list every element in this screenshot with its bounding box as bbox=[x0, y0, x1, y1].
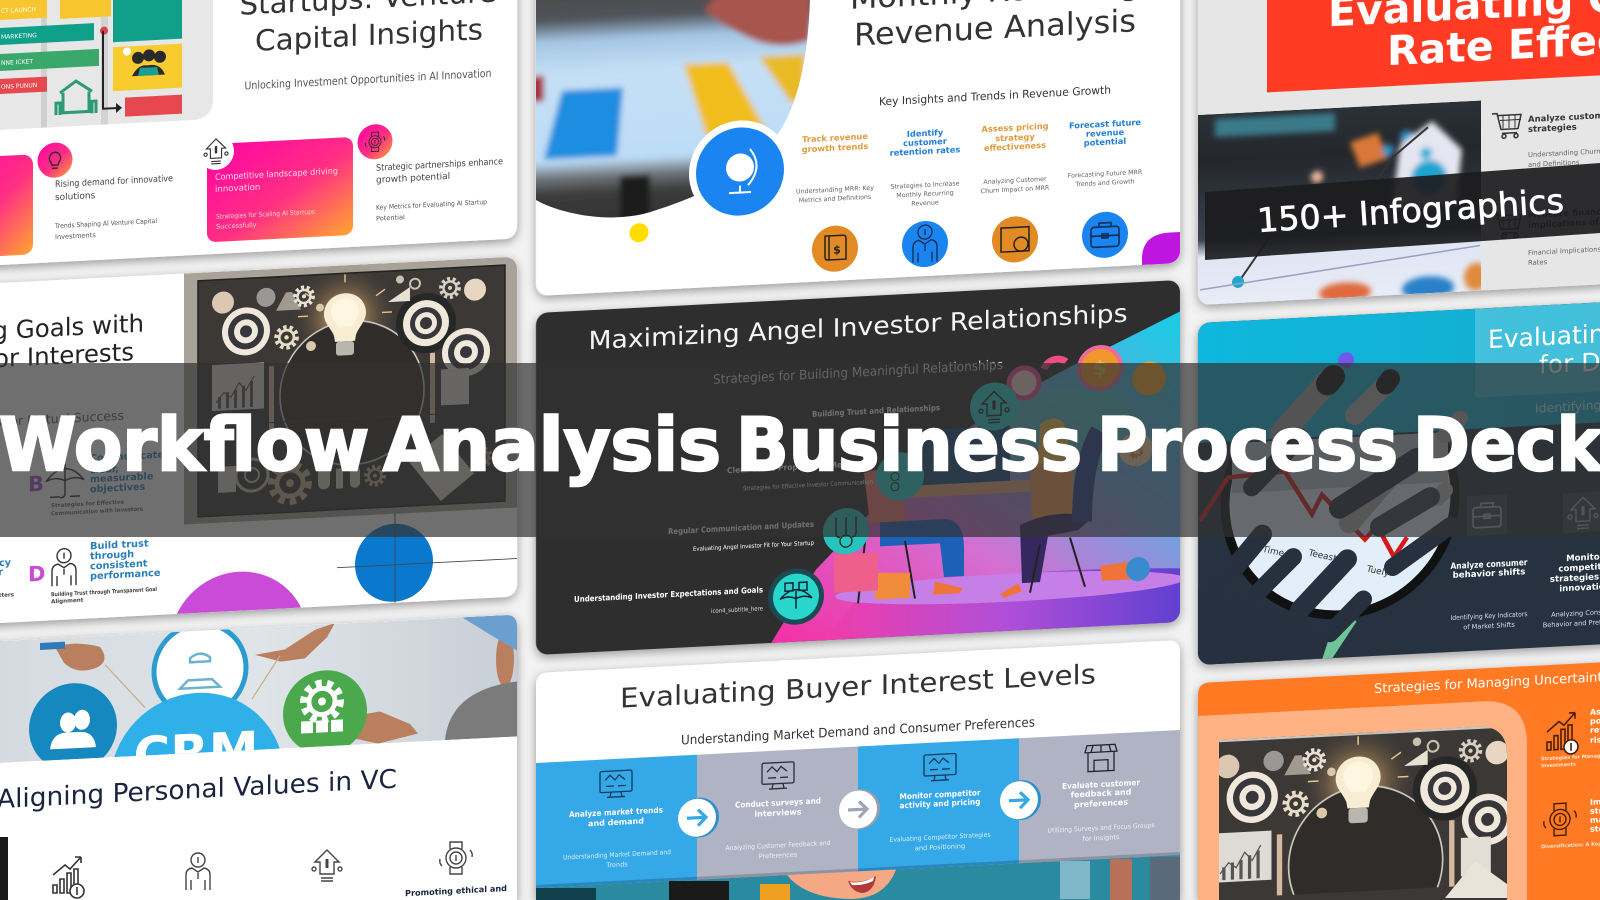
title panel bbox=[1475, 290, 1600, 419]
item D: performance bbox=[90, 568, 161, 582]
gradient card: competitive landscape bbox=[203, 137, 353, 242]
stripe: evaluate customer feedback bbox=[1019, 730, 1180, 863]
item: building trust: Building Trust and Relationships bbox=[812, 403, 940, 419]
slide card: maximizing angel investor relationships bbox=[536, 279, 1190, 660]
slide card: evaluating market shifts bbox=[1198, 290, 1600, 672]
feature: strategic partnerships: growth potential bbox=[376, 172, 450, 186]
stripe: evaluate customer feedback: for Insights bbox=[1083, 833, 1120, 843]
title band bbox=[0, 363, 1600, 537]
stripe: monitor competitor: and Positioning bbox=[915, 842, 965, 853]
item D: Build trust bbox=[90, 538, 149, 552]
title: Revenue Analysis bbox=[854, 3, 1136, 54]
column: forecast future revenue: revenue bbox=[1086, 127, 1124, 139]
title: Maximizing Angel Investor Relationships bbox=[589, 299, 1128, 355]
item D: D bbox=[28, 561, 45, 587]
slide card: aligning goals with investor interests bbox=[0, 254, 524, 632]
feature: strategic partnerships: Potential bbox=[376, 213, 405, 223]
stripe: conduct surveys: interviews bbox=[754, 807, 802, 819]
flowchart image: MARKETING bbox=[1, 32, 37, 41]
item: consumer behavior: Identifying Key Indicators bbox=[1450, 610, 1528, 622]
stripe: conduct surveys bbox=[697, 746, 858, 880]
column: identify customer retention: Strategies to Increase bbox=[890, 180, 960, 191]
blue globe badge bbox=[689, 120, 784, 216]
feature: rising demand: Trends Shaping AI Venture Capital bbox=[54, 217, 157, 230]
icon: investor man bbox=[186, 853, 210, 890]
flowchart image: ONS PUNUN bbox=[1, 82, 37, 91]
item: clear value bbox=[727, 460, 873, 491]
column: forecast future revenue: Forecast future bbox=[1069, 117, 1141, 131]
item B: clear, bbox=[90, 464, 119, 476]
column: assess pricing strategy: strategy bbox=[995, 131, 1035, 143]
item D: through bbox=[90, 549, 134, 562]
stripe: evaluate customer feedback: Utilizing Surveys and Focus Groups bbox=[1048, 821, 1155, 835]
feature: rising demand bbox=[38, 137, 173, 242]
main title: Business bbox=[736, 403, 1082, 488]
teal header bbox=[1198, 290, 1600, 443]
slide card: evaluating churn rate effects bbox=[1198, 0, 1600, 312]
diagonal stripes bbox=[1198, 347, 1460, 672]
stripe: evaluate customer feedback: feedback and bbox=[1071, 787, 1132, 800]
item B: measurable bbox=[90, 471, 154, 485]
flowchart image: NNE ICKET bbox=[1, 58, 33, 67]
churn item 2: Rates bbox=[1528, 258, 1548, 267]
column: identify customer retention: retention rates bbox=[890, 144, 960, 158]
column: identify customer retention: customer bbox=[903, 136, 948, 148]
stripe: conduct surveys: Analyzing Customer Feedback and bbox=[726, 839, 830, 852]
column: identify customer retention: Monthly Recurring bbox=[896, 190, 954, 200]
main title: Process bbox=[1097, 403, 1398, 488]
stripe: analyze market trends: Understanding Market Demand and bbox=[563, 848, 671, 862]
churn item 1: strategies bbox=[1528, 123, 1577, 135]
column: identify customer retention: Identify bbox=[907, 127, 944, 139]
flowchart image bbox=[0, 0, 213, 131]
ribbon: 150+ infographics: 150+ Infographics bbox=[1256, 181, 1565, 240]
arrow badge 1 bbox=[678, 797, 719, 839]
subtitle: Key Insights and Trends in Revenue Growth bbox=[879, 84, 1111, 108]
magnifying glass chart bbox=[1200, 379, 1455, 672]
column: assess pricing strategy: Churn Impact on MRR bbox=[981, 185, 1050, 195]
risk item 2 bbox=[1541, 795, 1600, 850]
CRM photo bbox=[0, 615, 517, 763]
column: forecast future revenue: potential bbox=[1084, 136, 1126, 148]
subtitle: Unlocking Investment Opportunities in AI Innovation bbox=[245, 67, 492, 92]
title bbox=[0, 314, 142, 368]
column: track revenue bbox=[796, 131, 874, 274]
column: assess pricing strategy: Assess pricing bbox=[981, 121, 1049, 134]
icon badge 4 bbox=[768, 567, 824, 626]
item: understanding investor expectations: icon4_subtitle_here bbox=[711, 605, 763, 615]
arrow badge 3 bbox=[1000, 779, 1041, 821]
item B: Strategies for Effective bbox=[51, 500, 124, 509]
column: track revenue: growth trends bbox=[802, 141, 868, 154]
gradient card: competitive landscape: innovation bbox=[215, 183, 260, 195]
stripe: evaluate customer feedback: Evaluate customer bbox=[1062, 778, 1140, 791]
subtitle: Strategies for Building Meaningful Relationships bbox=[713, 358, 1003, 388]
item: monitor competitor bbox=[1543, 490, 1600, 629]
stripe: conduct surveys: Preferences bbox=[759, 851, 798, 861]
board image bbox=[184, 253, 517, 525]
item: consumer behavior bbox=[1450, 493, 1528, 632]
item B: B bbox=[28, 471, 44, 497]
ribbon: 150+ infographics bbox=[1205, 163, 1600, 260]
feature: strategic partnerships: Strategic partnerships enhance bbox=[376, 157, 503, 174]
item B: Communication with Investors bbox=[51, 507, 144, 517]
stripe: monitor competitor: activity and pricing bbox=[899, 797, 981, 810]
icon: dollar house bbox=[312, 850, 342, 881]
arrow badge 2 bbox=[839, 788, 880, 830]
icon: growth chart bbox=[53, 857, 84, 898]
colourful illustration bbox=[768, 306, 1190, 648]
item: consumer behavior: of Market Shifts bbox=[1463, 621, 1515, 631]
column: identify customer retention bbox=[890, 126, 960, 269]
yellow dot bbox=[630, 223, 648, 243]
icon: dollar watch bbox=[440, 842, 472, 874]
item: clear value: Strategies for Effective Investor Communication bbox=[743, 479, 873, 492]
item: consumer behavior: behavior shifts bbox=[1453, 567, 1525, 581]
item D: consistent bbox=[90, 558, 148, 572]
board image bbox=[1201, 715, 1529, 900]
icon badge 1 bbox=[970, 381, 1018, 432]
slide card: evaluating buyer interest levels bbox=[536, 641, 1180, 900]
churn item 2 bbox=[1492, 206, 1600, 269]
column: assess pricing strategy: effectiveness bbox=[984, 140, 1046, 153]
column: assess pricing strategy: Analyzing Customer bbox=[983, 176, 1047, 186]
gradient card: competitive landscape: Successfully bbox=[216, 221, 257, 231]
stripe: monitor competitor bbox=[858, 738, 1019, 871]
column: assess pricing strategy bbox=[981, 121, 1050, 264]
colourful illustration: ₿ bbox=[1128, 439, 1144, 462]
black side bar bbox=[0, 837, 8, 900]
purple corner blob bbox=[1142, 232, 1180, 265]
blurred photo blob bbox=[536, 0, 810, 218]
feature: strategic partnerships: Key Metrics for Evaluating AI Startup bbox=[376, 198, 487, 212]
item: understanding investor expectations: Understanding Investor Expectations and Goals bbox=[574, 585, 763, 604]
item: consumer behavior: Analyze consumer bbox=[1450, 558, 1528, 572]
bottom photo bbox=[536, 855, 1180, 900]
item: regular communication bbox=[668, 522, 814, 551]
item: regular communication: Regular Communication and Updates bbox=[668, 520, 814, 536]
CRM photo: CRM bbox=[134, 721, 258, 785]
feature: strategic partnerships bbox=[358, 118, 503, 224]
stripe: analyze market trends bbox=[536, 755, 697, 888]
risk item 1 bbox=[1541, 706, 1600, 769]
column: forecast future revenue: Forecasting Future MRR bbox=[1068, 169, 1143, 180]
slide card: aligning personal values in VC bbox=[0, 607, 517, 900]
stripe: monitor competitor: Monitor competitor bbox=[899, 788, 981, 801]
analytics photo bbox=[1198, 100, 1488, 312]
magnifying glass chart: Time bbox=[1260, 545, 1286, 559]
icon badge 2 bbox=[876, 451, 924, 502]
item B: objectives bbox=[90, 482, 146, 495]
slide card: monthly recurring revenue analysis bbox=[526, 0, 1190, 301]
gradient card fragment bbox=[0, 154, 33, 259]
red title banner bbox=[1267, 0, 1600, 92]
gradient card: competitive landscape: Strategies for Scaling AI Startups bbox=[216, 208, 316, 221]
main title: Analysis bbox=[383, 403, 721, 488]
stripe: analyze market trends: Analyze market trends bbox=[569, 805, 663, 819]
main title: Workflow bbox=[0, 403, 369, 488]
colourful illustration: $ bbox=[1093, 356, 1107, 380]
peach panel bbox=[1198, 701, 1527, 900]
feature: rising demand: solutions bbox=[55, 191, 96, 203]
blue circle bbox=[355, 522, 433, 604]
column: forecast future revenue: Trends and Growth bbox=[1074, 178, 1135, 188]
item D: Building Trust through Transparent Goal bbox=[51, 587, 157, 598]
churn item 1: and Definitions bbox=[1528, 158, 1580, 169]
risk item 1: Investments bbox=[1541, 762, 1576, 769]
stripe: evaluate customer feedback: preferences bbox=[1074, 798, 1128, 809]
column: identify customer retention: Revenue bbox=[911, 199, 939, 208]
column: track revenue: Understanding MRR: Key bbox=[796, 185, 874, 196]
feature: rising demand: Rising demand for innovative bbox=[55, 174, 173, 190]
item D: Alignment bbox=[51, 598, 84, 605]
purple circle bbox=[177, 572, 301, 614]
column: track revenue: Metrics and Definitions bbox=[799, 194, 871, 205]
item: clear value: Clear Value Proposition Messaging bbox=[727, 459, 875, 475]
slide card: AI startups venture capital insights bbox=[0, 0, 517, 271]
column: forecast future revenue bbox=[1068, 117, 1143, 260]
churn item 1 bbox=[1492, 106, 1600, 171]
item: understanding investor expectations bbox=[574, 585, 763, 622]
flowchart image: CT LAUNCH bbox=[1, 6, 36, 15]
title: Aligning Personal Values in VC bbox=[0, 765, 397, 815]
stripe: monitor competitor: Evaluating Competitor Strategies bbox=[889, 831, 991, 844]
feature label: Promoting ethical and bbox=[405, 883, 507, 898]
magnifying glass chart: Tuely bbox=[1364, 564, 1391, 579]
stripe: conduct surveys: Conduct surveys and bbox=[735, 796, 821, 810]
magnifying glass chart: Teeast bbox=[1306, 548, 1338, 564]
title: Capital Insights bbox=[255, 12, 483, 58]
item: regular communication: Evaluating Angel Investor Fit for Your Startup bbox=[693, 540, 814, 553]
slide card: strategies for managing uncertainty bbox=[1198, 650, 1600, 900]
column: track revenue: $ bbox=[833, 243, 841, 257]
subtitle: Understanding Market Demand and Consumer Preferences bbox=[681, 715, 1035, 749]
stripe: analyze market trends: and demand bbox=[588, 816, 644, 828]
title: Evaluating Buyer Interest Levels bbox=[620, 659, 1096, 715]
title bbox=[240, 0, 497, 59]
gradient card: competitive landscape: Competitive landscape driving bbox=[215, 167, 338, 183]
stripe: analyze market trends: Trends bbox=[605, 860, 628, 869]
item B: Communicate bbox=[90, 450, 164, 464]
feature: rising demand: Investments bbox=[55, 231, 96, 241]
item B bbox=[28, 450, 164, 519]
icon badge 3 bbox=[823, 507, 869, 555]
column: track revenue: Track revenue bbox=[802, 131, 868, 144]
item D bbox=[0, 540, 160, 604]
